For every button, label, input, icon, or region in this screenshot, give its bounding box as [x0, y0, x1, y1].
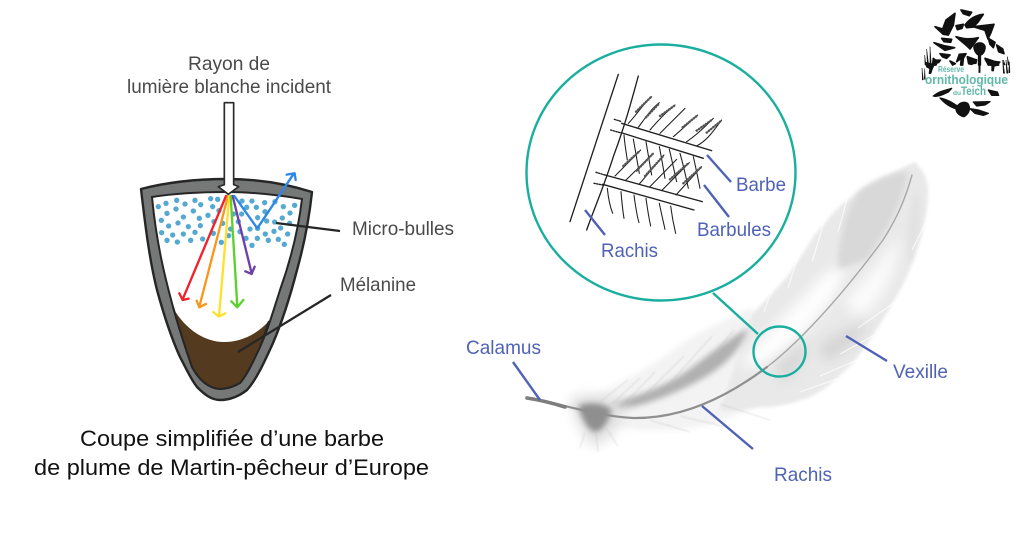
label: Rachis on feather	[702, 406, 832, 486]
label: Calamus	[466, 337, 541, 400]
purple ray	[233, 196, 255, 274]
cell wall	[141, 179, 312, 400]
logo text: du	[953, 91, 961, 97]
blue reflected ray	[234, 173, 296, 228]
feather illustration	[527, 162, 928, 452]
logo text: Réserve	[938, 65, 964, 74]
feather shaft	[527, 175, 912, 418]
magnifier small circle on feather	[754, 326, 806, 376]
yellow ray	[213, 196, 229, 317]
caption: Coupe simplifiée d’une barbe	[80, 426, 384, 451]
barbules	[607, 97, 722, 233]
label: Barbules: Barbules	[697, 219, 771, 241]
white notches in the vane edges	[764, 196, 926, 392]
feather barbs	[580, 330, 770, 452]
label: Rachis in magnifier: Rachis	[601, 240, 658, 262]
logo text: Teich	[961, 84, 986, 98]
leader line: melanin	[238, 295, 331, 352]
orange ray	[197, 196, 228, 307]
label: Barbules	[697, 185, 771, 241]
barbs	[594, 119, 712, 210]
logo upper bird silhouettes	[925, 10, 1009, 65]
magnifier large circle	[526, 44, 796, 300]
rachis lines	[570, 74, 638, 230]
label: incident white light ray: Rayon de	[188, 53, 270, 75]
label: incident white light ray: lumière blanche incident	[127, 76, 332, 98]
darker streak on the left vane	[610, 328, 748, 410]
micro-bubbles	[156, 196, 297, 248]
dark downy base	[570, 395, 625, 445]
melanin layer	[173, 308, 268, 389]
magnifier connector line	[713, 293, 758, 334]
coloured light rays	[179, 173, 296, 317]
caption	[34, 426, 429, 480]
green ray	[231, 196, 243, 307]
logo text: ornithologique	[925, 72, 1008, 87]
label: Vexille: Vexille	[893, 361, 948, 383]
label: Mélanine: Mélanine	[340, 274, 416, 296]
label: Barbe: Barbe	[736, 174, 786, 196]
label: Vexille	[846, 336, 948, 383]
incident white arrow	[218, 103, 239, 194]
label: Calamus: Calamus	[466, 337, 541, 359]
leader line: micro-bubbles	[276, 223, 340, 231]
logo text	[925, 65, 1008, 98]
label: Rachis in magnifier	[585, 210, 658, 262]
logo: Réserve ornithologique du Teich	[922, 10, 1010, 117]
caption: de plume de Martin-pêcheur d’Europe	[34, 455, 429, 480]
label: Rachis on feather: Rachis	[774, 464, 832, 486]
barb structure detail drawing	[570, 74, 722, 233]
label: incident white light ray	[127, 53, 332, 98]
barb cross-section diagram	[141, 103, 340, 400]
feather vane	[565, 162, 928, 452]
label: Barbe	[707, 155, 786, 196]
red ray	[179, 196, 226, 300]
logo lower animal silhouettes	[922, 60, 1010, 117]
label: Micro-bulles: Micro-bulles	[352, 218, 454, 240]
cell interior	[152, 192, 302, 389]
